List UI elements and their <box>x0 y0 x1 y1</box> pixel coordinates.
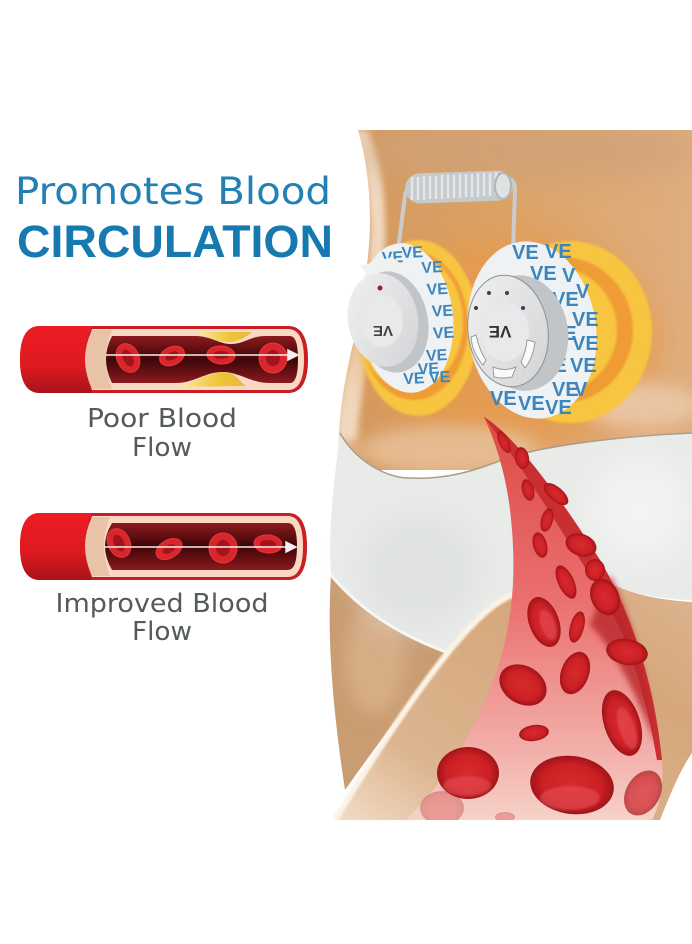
patch: VE <box>512 242 539 264</box>
coiled wire connecting the devices <box>398 170 515 250</box>
patch: VE <box>570 355 597 377</box>
left leg <box>330 575 446 790</box>
label: improved blood flow: Improved Blood <box>56 589 268 619</box>
device: left patch <box>340 238 461 398</box>
vessel: improved blood flow <box>20 513 307 580</box>
patch: V <box>576 281 590 303</box>
heat rings: left <box>357 240 478 416</box>
patch <box>456 233 608 427</box>
patch: VE <box>545 241 572 263</box>
body <box>468 269 576 397</box>
patch: VE <box>540 355 567 377</box>
patch: V <box>574 379 588 401</box>
blood vessel cross-section with red blood cells <box>405 417 670 825</box>
heat rings: right <box>487 241 652 423</box>
patch: VE <box>426 347 448 365</box>
label: improved blood flow: Flow <box>132 617 192 647</box>
cells <box>112 340 287 376</box>
plaque <box>196 332 252 342</box>
title: CIRCULATION <box>17 216 333 267</box>
patch: VE <box>381 249 404 267</box>
white underwear <box>330 433 692 652</box>
patch: VE VE <box>403 369 451 388</box>
patch: VE <box>530 263 557 285</box>
photo: woman's torso and legs <box>330 120 692 820</box>
patch: VE <box>401 244 424 262</box>
patch: VE <box>490 388 517 410</box>
device: left patch: VE <box>373 322 393 339</box>
title: Promotes Blood <box>15 170 331 213</box>
label: poor blood flow <box>87 404 237 463</box>
patch: VE <box>545 397 572 419</box>
patch: VE <box>421 259 444 277</box>
cells <box>103 525 283 564</box>
body <box>348 266 436 378</box>
title <box>15 170 333 267</box>
patch: VE <box>417 360 440 378</box>
torso skin <box>339 130 692 470</box>
label: poor blood flow: Flow <box>132 433 192 463</box>
button clip <box>360 257 411 292</box>
device: right patch <box>456 233 608 427</box>
patch: VE <box>552 289 579 311</box>
lumen <box>106 336 298 383</box>
patch: V <box>562 265 576 287</box>
flow arrow <box>106 350 298 360</box>
patch: VE <box>572 309 599 331</box>
vessel: poor blood flow <box>20 326 308 393</box>
button clip <box>484 258 531 292</box>
device: right patch: VE <box>489 322 511 341</box>
right thigh <box>335 578 692 820</box>
patch: VE <box>426 281 449 299</box>
patch: VE <box>552 379 579 401</box>
patch <box>351 238 461 398</box>
lumen <box>105 523 297 570</box>
flow arrow <box>104 542 296 552</box>
patch: VE <box>518 393 545 415</box>
patch: VE <box>432 324 455 343</box>
patch: VE <box>572 333 599 355</box>
label: poor blood flow: Poor Blood <box>87 404 237 434</box>
patch: VE <box>550 323 577 345</box>
label: improved blood flow <box>56 589 268 647</box>
patch: VE <box>431 303 454 321</box>
